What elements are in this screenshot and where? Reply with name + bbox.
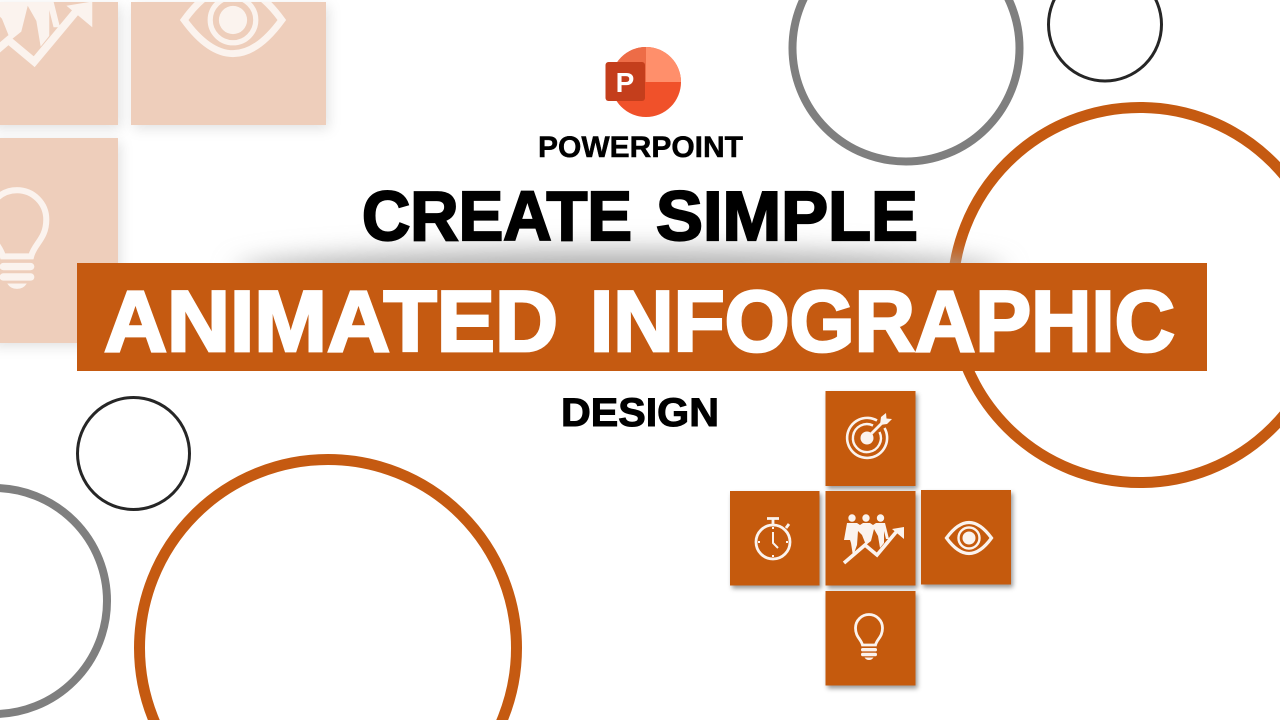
heading: CREATE SIMPLE: CREATE (362, 177, 632, 255)
heading: DESIGN: DESIGN (561, 391, 719, 435)
faded tile: people and arrow (0, 0, 118, 125)
icon cross (730, 391, 1011, 686)
icon: PowerPoint logo: P (616, 67, 634, 98)
circle: gray top (792, 0, 1020, 162)
circle: black top right (1048, 0, 1162, 81)
banner shadow (235, 250, 1005, 294)
icon: PowerPoint logo (606, 47, 681, 117)
faded tile: light bulb (0, 138, 118, 343)
tile: stopwatch (730, 491, 820, 586)
banner: ANIMATED INFOGRAPHIC: ANIMATED (104, 274, 558, 370)
faded tile: eye (131, 0, 326, 125)
circle: gray left (0, 488, 107, 714)
circle: black left (78, 398, 190, 510)
circle: orange bottom (140, 460, 516, 720)
tile: eye (921, 490, 1011, 584)
tile: people and growth arrow (826, 491, 916, 586)
circle: orange right (952, 108, 1280, 482)
faded icon tiles (0, 0, 326, 343)
heading: CREATE SIMPLE: SIMPLE (656, 177, 918, 255)
tile: target (826, 391, 916, 486)
banner: ANIMATED INFOGRAPHIC: INFOGRAPHIC (590, 274, 1175, 370)
tile: light bulb (826, 591, 916, 686)
heading: POWERPOINT: POWERPOINT (538, 131, 743, 164)
heading: CREATE SIMPLE (362, 177, 918, 255)
banner: ANIMATED INFOGRAPHIC (77, 263, 1207, 371)
